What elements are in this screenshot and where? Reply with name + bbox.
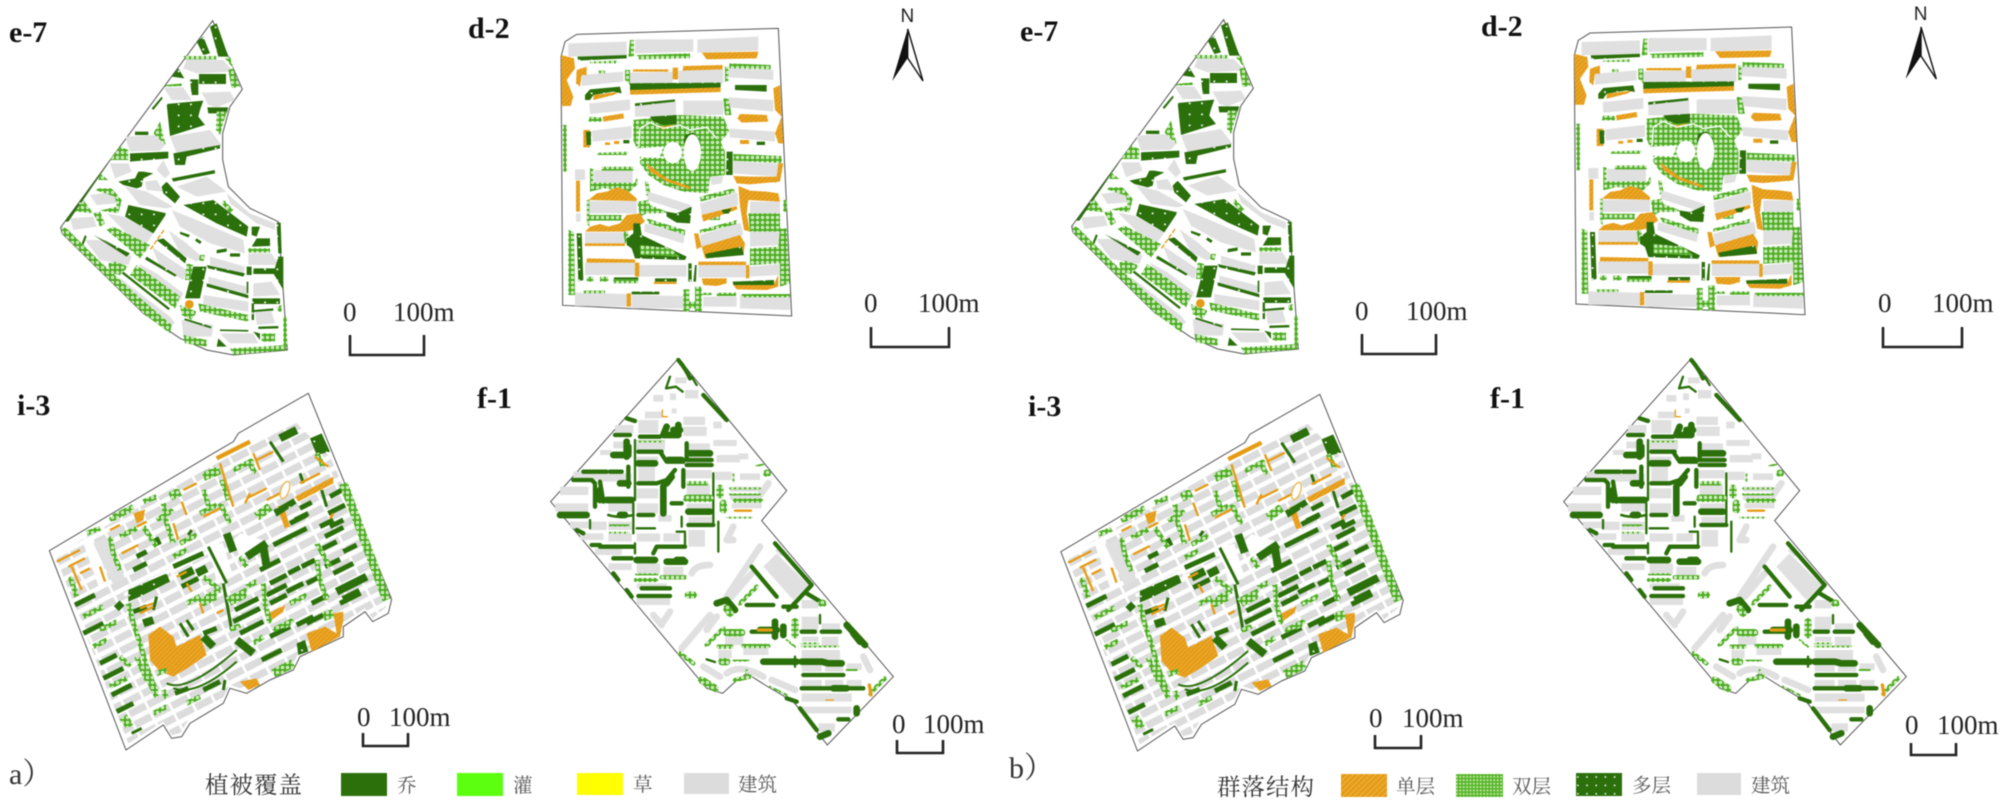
map: f-1 xyxy=(1564,358,1906,745)
legend item: shrub: 灌 xyxy=(513,775,533,797)
scale bar: i-3: 0 xyxy=(1369,703,1382,733)
scale bar: e-7: 100m xyxy=(1406,296,1468,326)
legend item: double layer xyxy=(1456,774,1552,798)
scale bar: e-7: 0 xyxy=(1355,296,1368,326)
north arrow xyxy=(892,6,923,81)
legend title: 群落结构 xyxy=(1217,774,1315,801)
scale bar: i-3 xyxy=(357,702,451,746)
legend item: building xyxy=(1697,773,1790,797)
scale bar: e-7: 0 xyxy=(343,297,356,327)
label: i-3: i-3 xyxy=(1028,390,1061,423)
scale bar: i-3 xyxy=(1369,703,1464,748)
legend item: grass: 草 xyxy=(633,774,653,796)
scale bar: d-2: 100m xyxy=(918,288,980,318)
map: d-2 xyxy=(561,28,792,316)
legend item: building: 建筑 xyxy=(738,774,777,796)
map: i-3 xyxy=(49,393,392,750)
legend item: shrub xyxy=(457,773,533,797)
map: i-3 xyxy=(1061,394,1403,751)
scale bar: e-7 xyxy=(1355,296,1468,354)
panel b: community structure maps xyxy=(1009,4,1999,801)
legend item: building: 建筑 xyxy=(1751,775,1790,797)
map: e-7 xyxy=(61,21,287,355)
legend item: tree xyxy=(341,773,417,797)
scale bar: f-1: 0 xyxy=(892,709,906,739)
label: i-3: i-3 xyxy=(17,389,50,422)
label: e-7: e-7 xyxy=(1020,15,1058,48)
label: d-2: d-2 xyxy=(1481,10,1523,43)
legend item: single layer xyxy=(1341,774,1436,798)
label: d-2: d-2 xyxy=(468,12,510,45)
label: f-1: f-1 xyxy=(1490,382,1525,415)
scale bar: i-3: 100m xyxy=(389,702,451,732)
scale bar: e-7: 100m xyxy=(393,297,455,327)
map: e-7 xyxy=(1072,20,1298,354)
legend title: 植被覆盖 xyxy=(205,772,303,799)
scale bar: f-1: 100m xyxy=(923,709,985,739)
scale bar: f-1 xyxy=(892,709,985,753)
scale bar: i-3: 0 xyxy=(357,702,370,732)
map: f-1 xyxy=(551,358,893,745)
legend item: single layer: 单层 xyxy=(1396,776,1436,798)
legend item: multi layer: 多层 xyxy=(1632,775,1672,797)
legend: community structure xyxy=(1217,773,1790,801)
map: d-2 xyxy=(1574,27,1805,315)
scale bar: f-1: 0 xyxy=(1905,710,1918,740)
scale bar: d-2: 100m xyxy=(1932,288,1994,318)
scale bar: i-3: 100m xyxy=(1402,703,1464,733)
scale bar: f-1 xyxy=(1905,710,1999,755)
scale bar: d-2 xyxy=(864,288,980,347)
legend item: tree: 乔 xyxy=(397,775,417,797)
scale bar: e-7 xyxy=(343,297,455,355)
north arrow: N xyxy=(900,6,914,27)
legend item: building xyxy=(684,773,777,796)
tag: a: a） xyxy=(9,758,52,791)
legend: vegetation cover xyxy=(205,772,777,799)
scale bar: f-1: 100m xyxy=(1937,710,1999,740)
north arrow xyxy=(1906,4,1936,79)
tag: b: b） xyxy=(1009,752,1054,785)
scale bar: d-2: 0 xyxy=(864,288,878,318)
scale bar: d-2: 0 xyxy=(1878,288,1892,318)
panel a: vegetation cover maps xyxy=(9,6,985,799)
legend item: double layer: 双层 xyxy=(1512,776,1552,798)
legend item: grass xyxy=(577,773,653,796)
label: f-1: f-1 xyxy=(477,382,512,415)
label: e-7: e-7 xyxy=(9,16,47,49)
legend item: multi layer xyxy=(1576,773,1672,797)
scale bar: d-2 xyxy=(1878,288,1994,347)
